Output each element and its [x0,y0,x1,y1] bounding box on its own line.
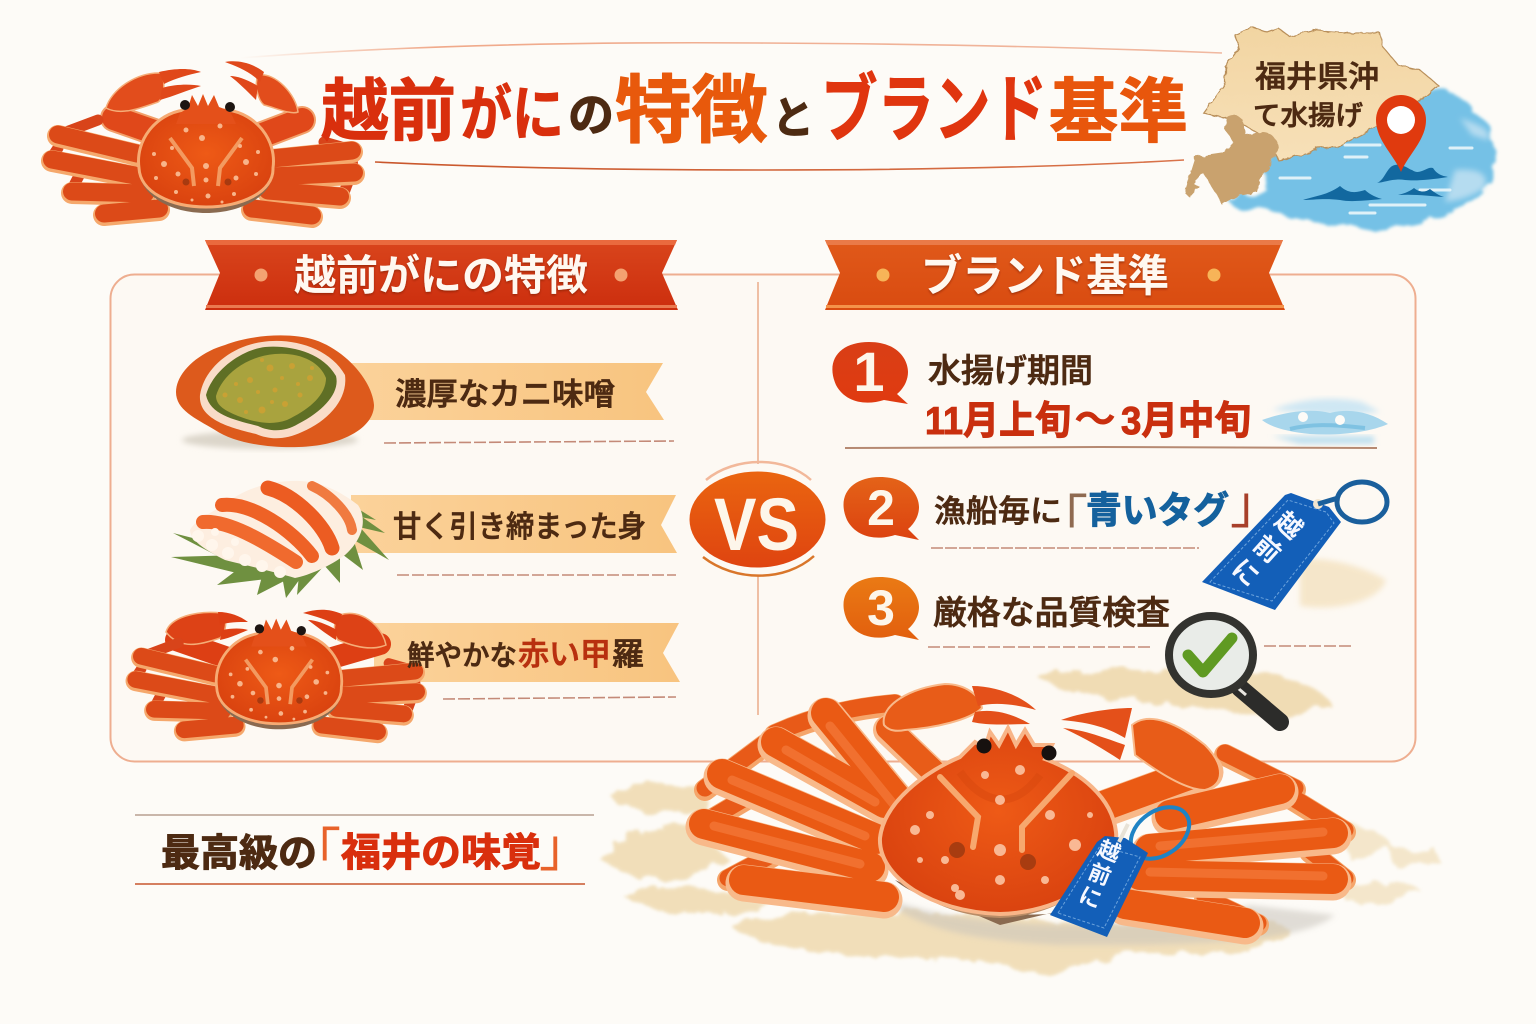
ribbon text 3: 鮮やかな [407,640,517,671]
standard 3: quality inspection [843,577,1351,647]
closing slogan [135,815,594,884]
big crab sand and shadow [600,784,1440,975]
map pin [1376,95,1426,172]
blue tag on crab: に [1075,882,1105,913]
period [925,396,1251,443]
label: 厳格な品質検査 [933,594,1170,631]
land: light [1203,27,1438,160]
label: 漁船毎に [934,494,1062,529]
crab illustration: top left [50,61,354,217]
label: 」 [1230,477,1282,535]
closing slogan: 」 [539,820,591,878]
wave wash [1262,399,1388,444]
ribbon text 1: 濃厚なカニ味噌 [395,377,615,412]
banner: brand standards [825,240,1285,310]
icon: magnifier with check [1169,616,1280,722]
ribbon 2 [351,495,677,553]
banner: features [205,240,678,310]
hero snow crab [703,684,1345,937]
number bubble 3 [843,577,919,640]
waves [1303,165,1448,201]
number bubble 2: 2 [867,480,895,536]
icon: blue tag: 越 [1269,505,1308,545]
closing slogan: 「 [289,825,341,883]
VS badge [690,462,826,576]
blue tag on crab [1050,797,1199,937]
icon: crab meat on leaves [171,481,389,598]
map text: 福井県沖 [1255,61,1379,94]
ribbon 3 [374,623,680,682]
label: 水揚げ期間 [928,352,1093,389]
period: ～ [1074,396,1116,443]
sand wash behind magnifier [1036,669,1330,717]
closing slogan: 福井の味覚 [341,832,541,875]
walking legs [704,713,1333,926]
map: Fukui coast and sea: て水揚げ [1253,101,1363,131]
dashed rule 3 [443,697,676,699]
closing slogan: 最高級の [161,833,317,875]
feature 3: vivid red shell: 赤い甲 [518,637,611,672]
standard 1: landing period [832,340,1388,448]
rule [928,646,1351,647]
feature 3: vivid red shell: 羅 [612,637,644,672]
ribbon 1 [351,363,664,420]
title: 特徴 [615,69,768,152]
number bubble 3: 3 [867,580,895,636]
icon: blue tag: 前 [1248,529,1287,569]
rule [931,547,1199,549]
dashed rule 2 [397,574,676,576]
centre divider [757,282,759,715]
feature 3: vivid red shell [134,610,680,733]
sea [1230,90,1494,229]
title: ブランド [821,68,1047,151]
sand wash behind tag [1300,559,1386,608]
rear leg segments [703,703,1345,925]
title rule bottom [375,160,1184,170]
period: 11月上旬 [925,400,1071,443]
title: の [568,89,614,141]
icon: blue tag [1202,482,1387,610]
carapace [880,728,1116,925]
label: 「 [1036,492,1088,550]
title: 越前 [321,74,456,150]
label: 青いタグ [1086,490,1229,531]
left claw [884,684,1036,778]
main panel frame [110,274,1416,762]
standard 2: blue tag [843,477,1282,550]
feature 2: sweet firm meat [171,481,677,598]
ribbon text 2: 甘く引き締まった身 [393,511,646,544]
title rule top [240,43,1222,58]
title [321,68,1188,152]
title: がに [460,81,564,148]
VS badge: VS [714,483,799,566]
number bubble 2 [843,477,919,540]
blue tag on crab: 前 [1085,859,1115,890]
title: と [772,94,814,143]
label [934,477,1282,550]
land: dark [1184,115,1278,205]
rule [845,447,1377,448]
icon: blue tag: に [1226,553,1266,593]
icon: shell with miso [176,335,374,449]
banner: brand standards: ブランド基準 [921,252,1169,301]
blue tag on crab: 越 [1094,836,1124,867]
number bubble 1: 1 [853,340,885,403]
right claw [1061,708,1220,790]
period: 3月中旬 [1121,400,1251,443]
icon: red crab [134,610,417,733]
number bubble 1 [832,340,908,404]
banner: features: 越前がにの特徴 [294,252,588,299]
dashed rule 1 [384,441,674,443]
feature 1: rich crab miso [176,335,674,449]
map: Fukui coast and sea [1184,27,1494,229]
title: 基準 [1049,73,1188,151]
